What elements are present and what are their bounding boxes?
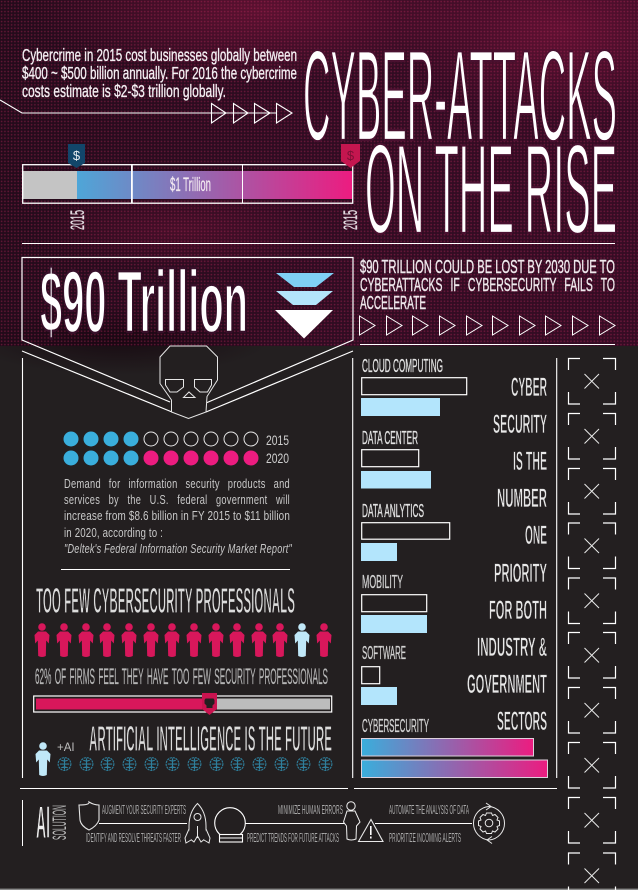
intro text block: Cybercrime in 2015 cost businesses globally between <box>22 45 297 65</box>
icon: gear with cycle arrows <box>473 803 505 844</box>
footer panel: AI solution: AUTOMATE THE ANALYSIS OF DATA <box>389 803 469 817</box>
footer labels <box>86 803 469 845</box>
bars: data analytics: DATA ANLYTICS <box>362 501 424 521</box>
footer panel: AI solution <box>22 796 505 848</box>
background: maroon dotted header <box>0 0 638 375</box>
bars: mobility <box>361 572 427 633</box>
paragraph: federal demand: "Deltek's Federal Information Security Market Report" <box>64 542 292 556</box>
footer panel: AI solution: AI <box>36 796 50 848</box>
bars: cybersecurity <box>362 716 548 778</box>
progress bar: 62% <box>34 693 332 715</box>
intro text block: costs estimate is $2-$3 trillion globally. <box>22 81 226 101</box>
bars: mobility: MOBILITY <box>362 572 403 592</box>
marker: 2015 dollar tag <box>68 144 85 168</box>
text: FOR BOTH <box>489 595 547 625</box>
triangle arrow row <box>360 316 615 335</box>
text: ONE <box>525 520 547 550</box>
footer panel: AI solution: PRIORITIZE INCOMING ALERTS <box>389 831 461 845</box>
90 trillion text block: ACCELERATE <box>360 293 426 313</box>
icon: downward triangles <box>275 273 334 338</box>
marker: end dollar tag: $ <box>347 148 355 163</box>
text: INDUSTRY & <box>477 632 547 662</box>
paragraph: federal demand: Demand for information security products and <box>64 476 290 491</box>
pictogram: brains <box>58 758 332 770</box>
label: plus AI: +AI <box>57 742 75 754</box>
footer labels: IDENTIFY AND RESOLVE THREATS FASTER <box>86 831 181 845</box>
marker: end dollar tag <box>341 144 360 168</box>
bars: data analytics <box>361 501 450 561</box>
marker: 2015 dollar tag: $ <box>73 148 81 163</box>
bar label: $1 Trillion <box>170 175 211 196</box>
bars: data center: DATA CENTER <box>362 428 418 448</box>
title <box>303 24 617 260</box>
icon: rocket <box>185 804 210 843</box>
marker: skull tag <box>202 693 217 715</box>
icon: person outline <box>344 802 360 840</box>
dot chart 2015 vs 2020: 2015 <box>266 432 289 448</box>
bars: cloud computing <box>361 356 467 416</box>
decorative target column <box>568 358 616 890</box>
dot chart 2015 vs 2020 <box>64 432 289 466</box>
text: CYBER <box>511 372 547 402</box>
footer labels: PREDICT TRENDS FOR FUTURE ATTACKS <box>247 831 339 845</box>
text: IS THE <box>513 446 547 476</box>
intro text block: $400 ~ $500 billion annually. For 2016 the cybercrime <box>22 63 297 83</box>
icon: crystal ball <box>215 808 245 842</box>
text: NUMBER <box>497 483 547 513</box>
pictogram: people <box>34 623 332 657</box>
bar chart: sectors <box>361 356 548 778</box>
icon: shield <box>79 802 99 830</box>
icon: warning triangle <box>358 820 383 842</box>
footer connector line <box>99 822 472 824</box>
frame lines for left and chart columns <box>20 358 557 788</box>
dot chart 2015 vs 2020: 2020 <box>266 450 289 466</box>
bars: cloud computing: CLOUD COMPUTING <box>362 356 443 376</box>
paragraph: federal demand: in 2020, according to : <box>64 525 163 540</box>
bars: cybersecurity: CYBERSECURITY <box>362 716 429 736</box>
bar chart: sectors: SOFTWARE <box>362 643 406 663</box>
divider under title <box>22 242 615 244</box>
footer labels: AUGMENT YOUR SECURITY EXPERTS <box>102 803 186 817</box>
icon: skull <box>160 346 218 418</box>
cost bar chart 2015 to trillion: 2015 <box>341 210 362 230</box>
text: SECURITY <box>493 409 547 439</box>
cost bar chart 2015 to trillion: 2015 <box>68 210 89 230</box>
text: PRIORITY <box>494 558 547 588</box>
intro text block <box>22 45 297 101</box>
footer labels: MINIMIZE HUMAN ERRORS <box>278 803 343 817</box>
paragraph: federal demand: services by the U.S. federal government will <box>64 492 290 507</box>
callout frame with chevrons <box>22 258 353 412</box>
icon: person plus AI <box>36 742 50 776</box>
bars: software <box>361 643 406 705</box>
cost bar chart 2015 to trillion <box>22 144 362 230</box>
paragraph: federal demand: increase from $8.6 billion in FY 2015 to $11 billion <box>64 508 290 523</box>
90 trillion text block <box>360 257 615 313</box>
text: $90 Trillion <box>40 252 248 351</box>
arrow line with triangles <box>0 100 292 123</box>
paragraph: federal demand <box>64 476 292 556</box>
bars: data center <box>361 428 431 488</box>
statement: number one priority <box>467 372 547 736</box>
text: SOLUTION <box>50 805 71 840</box>
text: SECTORS <box>497 706 547 736</box>
